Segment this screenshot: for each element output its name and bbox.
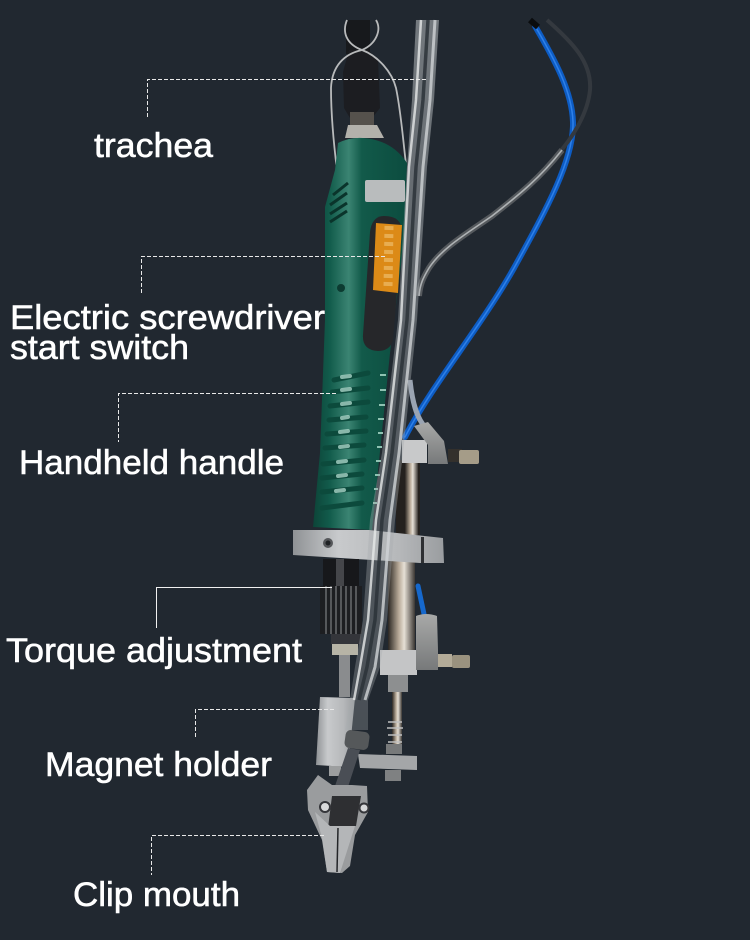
label: torque adjustment: Torque adjustment (6, 632, 303, 670)
icon: lower air fitting (380, 614, 470, 675)
icon: upper air fitting (402, 422, 479, 464)
icon: start switch with orange label (363, 216, 402, 351)
icon: nameplate sticker (365, 180, 405, 202)
icon: grip ribs (322, 373, 368, 508)
label: magnet holder: Magnet holder (45, 746, 272, 784)
icon: torque adjustment collar (320, 559, 362, 697)
callout: magnet holder (45, 710, 334, 784)
label: clip mouth: Clip mouth (73, 876, 240, 914)
panel: green screwdriver body (313, 138, 407, 530)
label: start switch: start switch (10, 329, 189, 367)
icon: metal mounting clamp (293, 530, 444, 563)
icon: clear feed tube (335, 20, 439, 790)
icon: magnet holder (316, 697, 355, 776)
label: start switch: Electric screwdriver (10, 299, 325, 337)
icon: wire hook loop (331, 20, 406, 170)
icon: power cord and strain relief (343, 20, 384, 138)
icon: clip mouth jaws (307, 775, 368, 873)
icon: vent slots (330, 183, 348, 222)
callout: trachea (94, 80, 426, 165)
callout: clip mouth (73, 836, 324, 914)
icon: parallel guide cylinder rods (388, 460, 420, 692)
label: handheld handle: Handheld handle (19, 444, 284, 482)
icon: dark and clear hose (410, 20, 590, 428)
label: trachea: trachea (94, 127, 213, 165)
callout: torque adjustment (6, 588, 332, 670)
icon: blue air hose (405, 26, 573, 614)
callout: handheld handle (19, 394, 336, 482)
icon: spring and guide foot (358, 692, 417, 781)
callout: electric screwdriver start switch (10, 256, 385, 367)
